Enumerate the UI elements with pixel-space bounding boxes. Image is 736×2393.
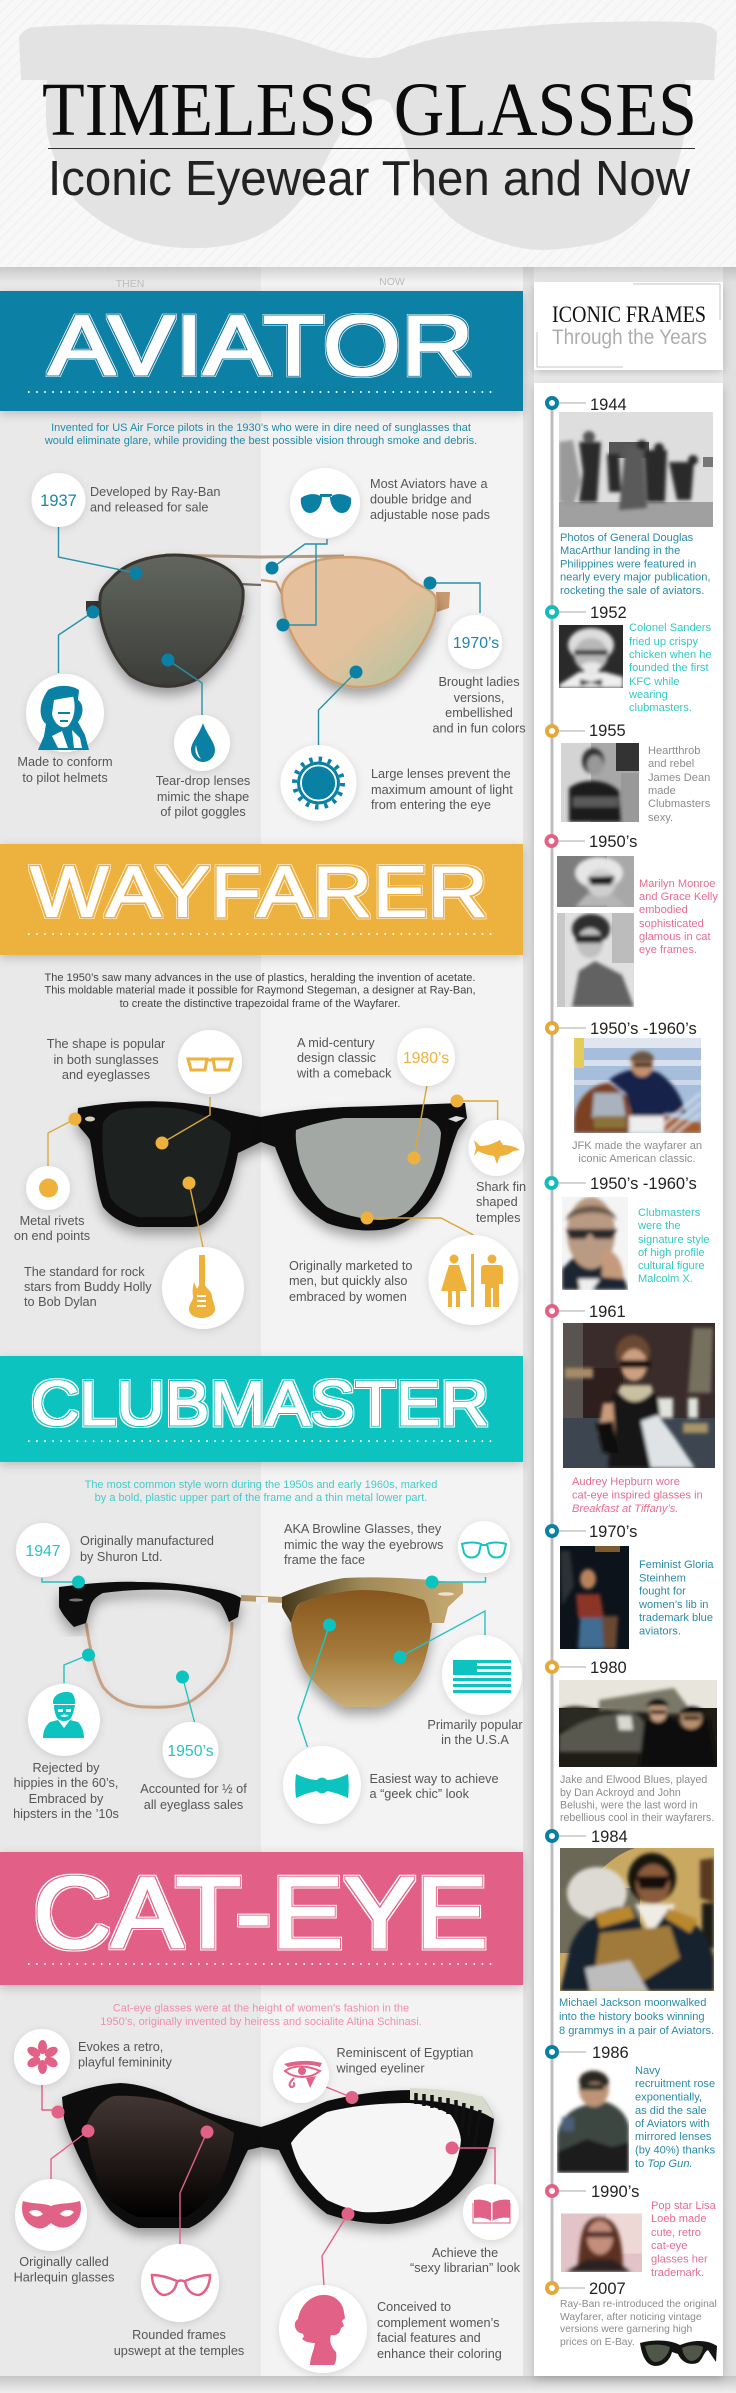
icon: guitar [189, 1255, 215, 1318]
event: 1944 [547, 396, 713, 597]
event: 1955 [547, 722, 711, 824]
callout: rounded frames: upswept at the temples [114, 2344, 244, 2358]
banner: cat-eye: CAT-EYE [33, 1858, 488, 1970]
caption: Audrey: Breakfast at Tiffany’s. [572, 1503, 678, 1515]
photo: Lisa Loeb [561, 2214, 642, 2272]
sidebar heading: iconic frames: Through the Years [552, 326, 707, 349]
callout: 1980's: with a comeback [296, 1066, 392, 1080]
icon: bow tie [295, 1774, 349, 1798]
caption: Sanders: founded the first [629, 662, 709, 674]
caption: Lisa Loeb: cat-eye [651, 2240, 687, 2252]
caption: Malcolm X: Clubmasters [638, 1207, 701, 1219]
caption: Michael Jackson: into the history books winning [559, 2011, 705, 2023]
event: 1961 [547, 1303, 715, 1515]
caption: Gloria Steinem: women’s lib in [638, 1599, 708, 1611]
caption: 2007 re-introduction: Wayfarer, after noticing vintage [560, 2312, 702, 2323]
callout: 1947 [16, 1523, 214, 1588]
caption: Gloria Steinem: fought for [639, 1586, 686, 1598]
callout: marketed to men: Originally marketed to [289, 1259, 412, 1273]
description: cat-eye: Cat-eye glasses were at the height of women’s fashion in the [113, 2002, 409, 2014]
icon: flower [26, 2040, 59, 2074]
caption: Top Gun: as did the sale [635, 2105, 707, 2117]
callout: popular in USA: Primarily popular [427, 1718, 523, 1732]
callout: shark fin temples: Shark fin [476, 1180, 526, 1194]
callout: rock stars [24, 1176, 244, 1329]
caption: MacArthur: nearly every major publication, [560, 572, 710, 584]
callout: tear-drop lenses: of pilot goggles [160, 805, 246, 819]
event: 1984 [547, 1828, 714, 2037]
banner: cat-eye [0, 1852, 523, 1985]
photo: Gloria Steinem [560, 1546, 629, 1649]
callout: sexy librarian [410, 2142, 521, 2275]
callout: tear-drop lenses: Tear-drop lenses [156, 774, 250, 788]
callout: 1937 [32, 473, 220, 580]
header: title area [0, 0, 736, 268]
photo: Colonel Sanders [559, 625, 623, 688]
callout: browline: frame the face [284, 1553, 365, 1567]
callout: harlequin [14, 2124, 114, 2284]
callout: 1950's: Accounted for ½ of [140, 1782, 247, 1796]
icon: mask [22, 2201, 81, 2228]
caption: Blues Brothers: Belushi, were the last word in [560, 1800, 698, 1812]
description: clubmaster: by a bold, plastic upper part of the frame and a thin metal lower part. [95, 1492, 427, 1504]
callout: egyptian eyeliner [273, 2046, 473, 2104]
callout: marketed to men [289, 1212, 518, 1325]
callout: shark fin temples: shaped [476, 1195, 518, 1209]
caption: Marilyn and Grace: and Grace Kelly [639, 891, 718, 903]
event: 1970's: 1970’s [589, 1523, 637, 1541]
event: 1986: 1986 [592, 2044, 629, 2062]
description: wayfarer: The 1950’s saw many advances in the use of plastics, heralding the invention of acetate. [45, 972, 475, 984]
caption: Blues Brothers: by Dan Ackroyd and John [560, 1787, 681, 1799]
event: 1950's cat-eye [546, 833, 718, 1007]
event: 1980: 1980 [590, 1659, 627, 1677]
caption: Sanders: clubmasters. [629, 702, 692, 714]
caption: MacArthur: Philippines were featured in [560, 558, 696, 570]
event: 1950's-1960's wayfarer [547, 1020, 702, 1165]
callout: retro femininity: playful femininity [78, 2056, 172, 2070]
description: clubmaster: The most common style worn during the 1950s and early 1960s, marked [85, 1479, 437, 1491]
title: TIMELESS GLASSES [42, 68, 697, 152]
callout: 1947: 1947 [25, 1543, 61, 1560]
callout: 1970's: 1970’s [453, 635, 499, 652]
callout: 1980's: A mid-century [297, 1036, 375, 1050]
icon: aviator glasses [301, 494, 351, 513]
callout: shape popular: and eyeglasses [62, 1068, 150, 1082]
callout: rock stars: stars from Buddy Holly [24, 1280, 152, 1294]
caption: MacArthur: rocketing the sale of aviators. [560, 585, 704, 597]
panel: cat-eye [0, 1852, 523, 2373]
caption: JFK: JFK made the wayfarer an [572, 1140, 702, 1152]
caption: Lisa Loeb: Loeb made [651, 2213, 707, 2225]
callout: large lenses: Large lenses prevent the [371, 767, 511, 781]
callout: browline [284, 1521, 510, 1588]
glasses: aviator [86, 555, 450, 687]
caption: Sanders: chicken when he [629, 649, 712, 661]
callout: shape popular: The shape is popular [47, 1037, 166, 1051]
banner: aviator: AVIATOR [48, 298, 474, 392]
icon: woman silhouette [295, 2295, 345, 2365]
caption: Top Gun: of Aviators with [635, 2118, 709, 2130]
panel: wayfarer [0, 844, 526, 1329]
then / now column labels [116, 276, 405, 290]
callout: pilot helmets: Made to conform [17, 755, 113, 769]
caption: Michael Jackson: Michael Jackson moonwalked [559, 1997, 706, 2009]
caption: JFK: iconic American classic. [578, 1153, 696, 1165]
caption: Malcolm X: signature style [638, 1234, 710, 1246]
callout: browline: AKA Browline Glasses, they [284, 1522, 442, 1536]
event: 2007 [547, 2280, 717, 2366]
callout: complement features: enhance their coloring [377, 2347, 502, 2361]
banner: clubmaster [0, 1356, 523, 1462]
callout: shark fin temples: temples [476, 1211, 520, 1225]
caption: Lisa Loeb: cute, retro [651, 2227, 701, 2239]
callout: complement features: facial features and [377, 2331, 481, 2345]
icon: sunglasses silhouette [19, 21, 717, 250]
callout: shape popular: in both sunglasses [53, 1053, 159, 1067]
description: aviator: would eliminate glare, while providing the best possible vision through smoke and debris. [44, 435, 477, 447]
icon: browline glasses [462, 1542, 506, 1558]
callout: marketed to men: embraced by women [289, 1290, 407, 1304]
callout: 1980's [296, 1028, 455, 1164]
event: 1986 [547, 2044, 716, 2173]
callout: double bridge [266, 468, 490, 632]
photo: James Dean [561, 743, 639, 822]
event: 1952 [547, 604, 712, 714]
photo: Michael Jackson [560, 1848, 714, 1991]
callout: browline: mimic the way the eyebrows [284, 1538, 443, 1552]
event: 1984: 1984 [591, 1828, 628, 1846]
callout: large lenses: maximum amount of light [371, 783, 513, 797]
glasses: wayfarer [77, 1101, 467, 1231]
caption: James Dean: and rebel [648, 758, 694, 770]
callout: egyptian eyeliner: Reminiscent of Egyptian [336, 2046, 473, 2060]
caption: James Dean: Clubmasters [648, 798, 711, 810]
event: 1950's-1960's clubmaster [546, 1175, 710, 1290]
event: 2007: 2007 [589, 2280, 626, 2298]
callout: metal rivets: on end points [14, 1229, 90, 1243]
callout: 1950's [140, 1670, 247, 1812]
callout: complement features [279, 2208, 502, 2373]
caption: 2007 re-introduction: prices on E-Bay. [560, 2337, 635, 2348]
glasses: cat-eye [62, 2083, 494, 2228]
callout: retro femininity [14, 2029, 172, 2118]
callout: 1937: and released for sale [90, 500, 208, 514]
icon: drop [191, 723, 215, 762]
event: 1950's-1960's clubmaster: 1950’s -1960’s [590, 1175, 697, 1193]
banner: clubmaster: CLUBMASTER [31, 1369, 489, 1439]
caption: James Dean: James Dean [648, 772, 710, 784]
banner: wayfarer [0, 844, 523, 955]
callout: tear-drop lenses: mimic the shape [157, 790, 249, 804]
callout: 1980's: 1980’s [403, 1050, 449, 1067]
photo: Top Gun [557, 2068, 629, 2173]
callout: metal rivets [14, 1112, 90, 1243]
event: 1990's [547, 2183, 717, 2279]
callout: 1950's: 1950’s [167, 1743, 214, 1760]
caption: Lisa Loeb: Pop star Lisa [651, 2200, 717, 2212]
callout: complement features: Conceived to [377, 2300, 451, 2314]
callout: 1937: Developed by Ray-Ban [90, 485, 220, 499]
then / now column labels: THEN [116, 278, 144, 290]
callout: large lenses [280, 666, 513, 821]
callout: retro femininity: Evokes a retro, [78, 2040, 163, 2054]
callout: double bridge: double bridge and [370, 492, 472, 506]
banner: aviator [0, 291, 523, 411]
caption: Top Gun: Navy [635, 2065, 661, 2077]
callout: harlequin: Originally called [19, 2255, 109, 2269]
then / now column labels: NOW [379, 276, 405, 288]
description: wayfarer: to create the distinctive trapezoidal frame of the Wayfarer. [120, 998, 400, 1010]
callout: 1970's: versions, [454, 691, 504, 705]
icon: eye of horus [284, 2061, 322, 2088]
photo: MacArthur landing [559, 412, 713, 527]
caption: Marilyn and Grace: glamous in cat [639, 931, 711, 943]
sidebar heading: iconic frames [534, 282, 723, 370]
callout: 1970's: and in fun colors [432, 722, 526, 736]
photo: Malcolm X [562, 1197, 628, 1290]
callout: double bridge: adjustable nose pads [370, 508, 490, 522]
icon: pilot [38, 686, 89, 750]
callout: 1980's: design classic [297, 1051, 377, 1065]
caption: Malcolm X: Malcolm X. [638, 1273, 693, 1285]
callout: egyptian eyeliner: winged eyeliner [336, 2062, 425, 2076]
subtitle: Iconic Eyewear Then and Now [48, 152, 691, 206]
event: 1980 [547, 1659, 717, 1824]
event: 1955: 1955 [589, 722, 626, 740]
icon: rivet [39, 1178, 58, 1198]
event: 1944: 1944 [590, 396, 627, 414]
callout: large lenses: from entering the eye [371, 798, 491, 812]
callout: pilot helmets: to pilot helmets [22, 771, 108, 785]
callout: sexy librarian: “sexy librarian” look [410, 2261, 521, 2275]
caption: MacArthur: MacArthur landing in the [560, 545, 680, 557]
caption: Audrey: cat-eye inspired glasses in [572, 1490, 703, 1502]
icon: sun [294, 759, 342, 807]
callout: geek chic: a “geek chic” look [370, 1787, 470, 1801]
caption: Gloria Steinem: Steinhem [639, 1572, 686, 1584]
caption: Gloria Steinem: aviators. [639, 1626, 681, 1638]
caption: James Dean: Heartthrob [648, 745, 700, 757]
photo: Marilyn Monroe [557, 856, 634, 907]
callout: hippies and hipsters [13, 1648, 119, 1821]
caption: Sanders: fried up crispy [629, 636, 699, 648]
callout: 1950's: all eyeglass sales [144, 1798, 243, 1812]
event: 1990's: 1990’s [591, 2183, 639, 2201]
callout: shark fin temples [450, 1094, 526, 1225]
callout: hippies and hipsters: Embraced by [29, 1792, 104, 1806]
photo: wayfarer sunglasses [640, 2341, 717, 2366]
event: 1950's cat-eye: 1950’s [589, 833, 637, 851]
caption: 2007 re-introduction: Ray-Ban re-introduced the original [560, 2299, 717, 2310]
sidebar heading: iconic frames: ICONIC FRAMES [552, 302, 706, 327]
caption: Audrey: Audrey Hepburn wore [572, 1476, 680, 1488]
caption: James Dean: made [648, 785, 676, 797]
callout: 1970's: Brought ladies [438, 675, 520, 689]
description: cat-eye: 1950’s, originally invented by heiress and socialite Altina Schinasi. [100, 2016, 422, 2028]
caption: Lisa Loeb: trademark. [651, 2267, 704, 2279]
icon: woman and man [441, 1254, 503, 1307]
icon: glasses [188, 1059, 232, 1070]
callout: hippies and hipsters: Rejected by [32, 1761, 100, 1775]
caption: Top Gun: (by 40%) thanks [635, 2144, 716, 2156]
callout: tear-drop lenses [156, 654, 250, 819]
banner: wayfarer: WAYFARER [30, 852, 488, 932]
callout: complement features: complement women’s [377, 2316, 499, 2330]
icon: shark [474, 1140, 520, 1164]
callout: pilot helmets [17, 606, 113, 785]
caption: Michael Jackson: 8 grammys in a pair of Aviators. [559, 2025, 714, 2037]
photo: JFK [574, 1038, 701, 1133]
event: 1952: 1952 [590, 604, 627, 622]
panel: aviator [0, 291, 526, 821]
callout: geek chic [283, 1618, 499, 1824]
caption: Blues Brothers: rebellious cool in their wayfarers. [560, 1812, 714, 1824]
description: aviator: Invented for US Air Force pilots in the 1930’s who were in dire need of sunglasses that [51, 422, 471, 434]
callout: shape popular [47, 1030, 242, 1150]
caption: Marilyn and Grace: eye frames. [639, 944, 697, 956]
caption: Marilyn and Grace: Marilyn Monroe [639, 878, 715, 890]
caption: Sanders: Colonel Sanders [629, 622, 711, 634]
caption: Marilyn and Grace: sophisticated [639, 918, 704, 930]
callout: 1970's [424, 576, 526, 736]
sidebar: timeline [534, 383, 723, 2376]
caption: Marilyn and Grace: embodied [639, 904, 688, 916]
caption: Top Gun: recruitment rose [635, 2078, 715, 2090]
caption: Lisa Loeb: glasses her [651, 2254, 708, 2266]
icon: book [473, 2200, 510, 2223]
caption: Sanders: wearing [628, 689, 668, 701]
callout: rounded frames: Rounded frames [132, 2328, 226, 2342]
caption: James Dean: sexy. [648, 812, 673, 824]
callout: hippies and hipsters: hippies in the 60’s, [14, 1776, 118, 1790]
photo: Blues Brothers [559, 1680, 717, 1767]
description: wayfarer: This moldable material made it possible for Raymond Stegeman, a designer at Ray-Ban, [44, 984, 476, 996]
caption: MacArthur: Photos of General Douglas [560, 532, 694, 544]
event: 1950's-1960's wayfarer: 1950’s -1960’s [590, 1020, 697, 1038]
callout: sexy librarian: Achieve the [432, 2246, 498, 2260]
event: 1970's [547, 1523, 714, 1649]
callout: rock stars: The standard for rock [24, 1265, 145, 1279]
callout: popular in USA [394, 1611, 523, 1747]
glasses: clubmaster [59, 1577, 463, 1707]
callout: 1970's: embellished [445, 706, 513, 720]
caption: Top Gun: mirrored lenses [635, 2131, 712, 2143]
caption: Top Gun: to Top Gun. [635, 2158, 693, 2170]
callout: 1947: by Shuron Ltd. [80, 1550, 163, 1564]
caption: Malcolm X: cultural figure [638, 1260, 705, 1272]
callout: rock stars: to Bob Dylan [24, 1295, 97, 1309]
caption: Malcolm X: of high profile [638, 1247, 705, 1259]
callout: popular in USA: in the U.S.A [441, 1733, 509, 1747]
callout: marketed to men: men, but quickly also [289, 1274, 407, 1288]
icon: hipster [43, 1692, 84, 1738]
caption: Sanders: KFC while [629, 676, 680, 688]
event: 1961: 1961 [589, 1303, 626, 1321]
caption: Gloria Steinem: trademark blue [639, 1612, 713, 1624]
callout: metal rivets: Metal rivets [20, 1214, 84, 1228]
photo: Audrey Hepburn [563, 1323, 715, 1468]
callout: harlequin: Harlequin glasses [14, 2270, 114, 2284]
callout: hippies and hipsters: hipsters in the ’10s [13, 1807, 119, 1821]
caption: Top Gun: exponentially, [635, 2092, 702, 2104]
callout: double bridge: Most Aviators have a [370, 477, 488, 491]
caption: Gloria Steinem: Feminist Gloria [639, 1559, 714, 1571]
icon: cat-eye glasses [152, 2275, 210, 2295]
panel: clubmaster [0, 1356, 523, 1824]
caption: Blues Brothers: Jake and Elwood Blues, played [560, 1774, 707, 1786]
callout: 1937: 1937 [40, 492, 77, 510]
callout: rounded frames [114, 2126, 244, 2358]
caption: 2007 re-introduction: versions were garnering high [560, 2324, 692, 2335]
caption: Malcolm X: were the [637, 1220, 681, 1232]
icon: flag [453, 1660, 511, 1693]
photo: Grace Kelly [557, 913, 634, 1007]
callout: 1947: Originally manufactured [80, 1534, 214, 1548]
callout: geek chic: Easiest way to achieve [370, 1772, 499, 1786]
